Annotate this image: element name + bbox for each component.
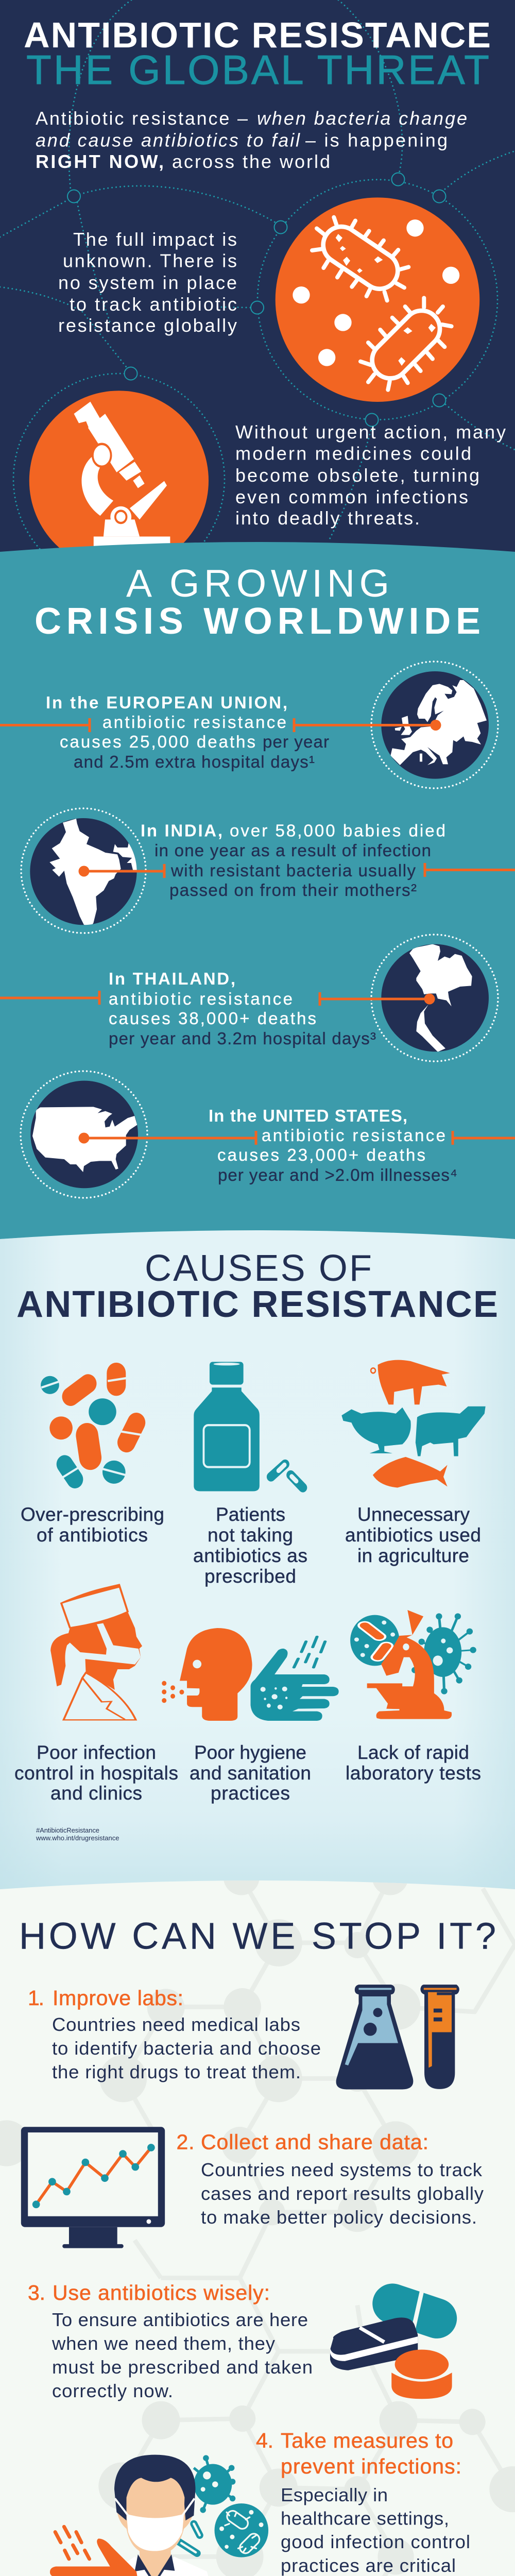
labels: row two: practices bbox=[211, 1783, 290, 1804]
panel: intro bbox=[0, 0, 515, 585]
text: india bbox=[141, 821, 445, 900]
map: united states bbox=[21, 1071, 147, 1198]
text: thailand bbox=[109, 969, 376, 1048]
step 2: collect and share data bbox=[176, 2130, 484, 2228]
intro text bbox=[36, 108, 467, 172]
panel: causes of antibiotic resistance bbox=[0, 1230, 515, 1901]
step 3: use antibiotics wisely: must be prescribed and taken bbox=[52, 2357, 313, 2378]
map: india bbox=[21, 808, 146, 933]
step 1: improve labs: 1. bbox=[28, 1986, 44, 2010]
title: ANTIBIOTIC RESISTANCE bbox=[24, 15, 491, 55]
step 2: collect and share data: Collect and share data: bbox=[201, 2130, 428, 2154]
labels: row two: control in hospitals bbox=[14, 1762, 178, 1784]
text: european union: antibiotic resistance bbox=[102, 713, 286, 732]
labels: row two: Poor infection bbox=[37, 1742, 156, 1763]
step 1: improve labs bbox=[28, 1986, 321, 2082]
step 3: use antibiotics wisely bbox=[28, 2281, 313, 2401]
icon: bacteria in orange circle bbox=[276, 197, 479, 402]
intro text: when bacteria change bbox=[257, 108, 467, 129]
panel: a growing crisis worldwide bbox=[0, 542, 515, 1247]
labels: row one: antibiotics as bbox=[193, 1545, 307, 1566]
labels: row two: Lack of rapid bbox=[357, 1742, 469, 1763]
text: thailand: In THAILAND, bbox=[109, 969, 235, 988]
step 1: improve labs: to identify bacteria and choose bbox=[52, 2038, 321, 2059]
icon: coughing head bbox=[162, 1628, 252, 1721]
step 3: use antibiotics wisely: correctly now. bbox=[52, 2380, 173, 2401]
text: without urgent action: become obsolete, turning bbox=[235, 465, 479, 486]
text: full impact unknown: resistance globally bbox=[58, 315, 237, 336]
connector: india bbox=[78, 863, 515, 878]
labels: row one: prescribed bbox=[204, 1566, 296, 1587]
step 4: take measures: Take measures to bbox=[281, 2429, 453, 2452]
intro text: RIGHT NOW, bbox=[36, 151, 164, 172]
icon: capsule and tablets bbox=[330, 2287, 452, 2399]
connector: united states bbox=[78, 1131, 515, 1145]
hashtag and link: #AntibioticResistance bbox=[36, 1826, 99, 1834]
step 1: improve labs: Countries need medical labs bbox=[52, 2014, 300, 2035]
text: european union: causes 25,000 deaths bbox=[60, 732, 255, 751]
labels: row two: Poor hygiene bbox=[194, 1742, 306, 1763]
heading: a growing crisis worldwide: CRISIS WORLDWIDE bbox=[35, 601, 480, 642]
text: united states: per year and >2.0m illnesses⁴ bbox=[218, 1165, 457, 1184]
heading: a growing crisis worldwide bbox=[35, 562, 480, 642]
hashtag and link: www.who.int/drugresistance bbox=[36, 1834, 119, 1842]
text: united states: In the UNITED STATES, bbox=[209, 1106, 407, 1125]
labels: row two bbox=[14, 1742, 481, 1804]
icon: doctor with mask, germs and hand bbox=[40, 2455, 268, 2576]
text: european union bbox=[46, 693, 329, 771]
labels: row one: antibiotics used bbox=[345, 1524, 481, 1546]
text: full impact unknown: The full impact is bbox=[73, 229, 237, 250]
text: united states: antibiotic resistance bbox=[262, 1126, 445, 1145]
text: without urgent action: into deadly threats. bbox=[235, 507, 420, 529]
text: thailand: per year and 3.2m hospital days³ bbox=[109, 1029, 376, 1048]
icon: masked nurse bbox=[50, 1585, 142, 1720]
step 4: take measures bbox=[256, 2429, 470, 2576]
step 3: use antibiotics wisely: Use antibiotics wisely: bbox=[53, 2281, 270, 2304]
heading: causes: CAUSES OF bbox=[145, 1248, 372, 1289]
text: thailand: antibiotic resistance bbox=[109, 989, 293, 1008]
text: united states bbox=[209, 1106, 457, 1184]
heading: a growing crisis worldwide: A GROWING bbox=[126, 562, 389, 605]
text: thailand: causes 38,000+ deaths bbox=[109, 1009, 316, 1028]
icon: medicine bottle bbox=[194, 1362, 303, 1492]
step 2: collect and share data: cases and report results globally bbox=[201, 2183, 484, 2204]
step 3: use antibiotics wisely: To ensure antibiotics are here bbox=[52, 2309, 308, 2330]
step 4: take measures: good infection control bbox=[281, 2531, 470, 2552]
text: full impact unknown: no system in place bbox=[58, 272, 237, 293]
icon: farm animals bbox=[341, 1360, 486, 1488]
step 2: collect and share data: 2. bbox=[176, 2130, 195, 2154]
step 4: take measures: Especially in bbox=[281, 2484, 388, 2505]
text: india: passed on from their mothers² bbox=[169, 880, 417, 900]
heading: causes bbox=[16, 1248, 498, 1325]
text: without urgent action bbox=[235, 421, 506, 529]
step 4: take measures: 4. bbox=[256, 2429, 273, 2452]
step 1: improve labs: the right drugs to treat them. bbox=[52, 2061, 301, 2082]
labels: row one: Patients bbox=[216, 1504, 285, 1525]
text: european union: and 2.5m extra hospital days¹ bbox=[74, 752, 315, 771]
title: THE GLOBAL THREAT bbox=[26, 47, 489, 93]
text: full impact unknown: unknown. There is bbox=[63, 250, 237, 271]
icon: pills bbox=[41, 1373, 144, 1484]
step 1: improve labs: Improve labs: bbox=[53, 1986, 183, 2010]
intro text: – is happening bbox=[305, 130, 448, 150]
icon: microscope with germs bbox=[350, 1610, 476, 1719]
heading: how can we stop it: HOW CAN WE STOP IT? bbox=[19, 1916, 496, 1957]
text: european union: per year bbox=[263, 732, 329, 751]
text: india: with resistant bacteria usually bbox=[170, 861, 416, 880]
text: full impact unknown bbox=[58, 229, 237, 336]
text: without urgent action: even common infections bbox=[235, 486, 468, 507]
text: without urgent action: Without urgent action, many bbox=[235, 421, 506, 443]
labels: row one: not taking bbox=[208, 1524, 293, 1546]
hashtag and link bbox=[36, 1826, 119, 1842]
virus and germ circle bbox=[179, 2455, 268, 2557]
labels: row two: and clinics bbox=[50, 1783, 142, 1804]
text: united states: causes 23,000+ deaths bbox=[217, 1145, 425, 1164]
intro text: Antibiotic resistance – bbox=[36, 108, 248, 129]
intro text: and cause antibiotics to fail bbox=[36, 130, 300, 150]
step 4: take measures: prevent infections: bbox=[281, 2454, 461, 2478]
text: full impact unknown: to track antibiotic bbox=[70, 294, 237, 315]
dotted molecular network bbox=[0, 0, 515, 585]
text: european union: In the EUROPEAN UNION, bbox=[46, 693, 287, 712]
step 3: use antibiotics wisely: when we need them, they bbox=[52, 2333, 276, 2354]
text: india: In INDIA, bbox=[141, 821, 222, 840]
icon: dirty hand bbox=[251, 1637, 339, 1721]
labels: row one: of antibiotics bbox=[37, 1524, 148, 1546]
icon: flask and test tube bbox=[336, 1985, 459, 2090]
connector: european union bbox=[0, 718, 441, 732]
labels: row two: laboratory tests bbox=[346, 1762, 481, 1784]
panel: how can we stop it bbox=[0, 1880, 515, 2576]
step 3: use antibiotics wisely: 3. bbox=[28, 2281, 45, 2304]
icon: microscope in orange circle bbox=[29, 391, 209, 570]
labels: row one bbox=[21, 1504, 481, 1587]
step 2: collect and share data: to make better policy decisions. bbox=[201, 2207, 477, 2228]
step 4: take measures: practices are critical bbox=[281, 2555, 456, 2576]
step 2: collect and share data: Countries need systems to track bbox=[201, 2159, 483, 2180]
heading: causes: ANTIBIOTIC RESISTANCE bbox=[16, 1284, 498, 1325]
labels: row one: in agriculture bbox=[357, 1545, 469, 1566]
labels: row one: Unnecessary bbox=[357, 1504, 470, 1525]
connector: thailand bbox=[0, 991, 435, 1006]
labels: row one: Over-prescribing bbox=[21, 1504, 164, 1525]
step 4: take measures: healthcare settings, bbox=[281, 2508, 449, 2529]
labels: row two: and sanitation bbox=[190, 1762, 311, 1784]
icon: monitor with line chart bbox=[21, 2127, 165, 2248]
intro text: across the world bbox=[172, 151, 330, 172]
text: india: in one year as a result of infection bbox=[154, 841, 431, 860]
title bbox=[24, 15, 491, 93]
map: european union bbox=[371, 662, 498, 788]
text: india: over 58,000 babies died bbox=[230, 821, 445, 840]
text: without urgent action: modern medicines could bbox=[235, 443, 471, 464]
map: thailand bbox=[371, 935, 498, 1061]
